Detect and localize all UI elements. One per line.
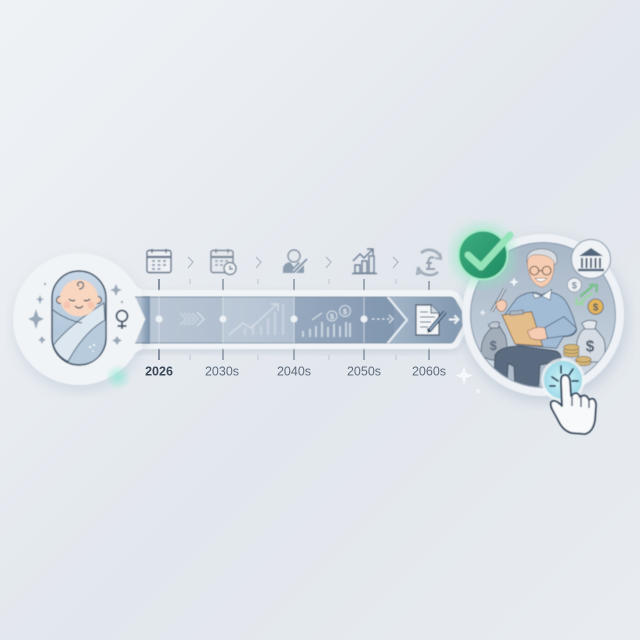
panel: timeline band [130,290,472,352]
panel: baby circle [13,253,150,391]
pen hand [492,288,505,312]
hand on clipboard [527,327,547,340]
chart: coins with bars: $ [330,312,335,321]
money bag left [481,322,507,360]
coin dollar small [567,278,581,292]
label 2050s: 2050s [347,364,381,378]
chart: chevrons faint [180,312,204,326]
head [527,249,557,265]
exchange arrows [580,285,597,297]
legs [493,346,561,390]
label 2040s: 2040s [277,364,311,378]
clipboard [502,312,543,346]
illustration: seated man: $ [572,280,578,290]
forearm [545,317,577,338]
label 2026: 2026 [145,364,173,378]
timeline icons row [147,249,441,275]
illustration: seated man: $ [593,302,599,313]
chart: coins with bars: $ [343,307,348,316]
label 2060s: 2060s [412,364,446,378]
arrowhead tip section [390,296,456,344]
money bag left: $ [490,339,497,353]
chart: coins with bars [303,306,350,337]
icon: person with pen [283,250,307,273]
sparkles [509,277,519,287]
money bag right [576,320,605,362]
icon: green check badge [451,223,515,287]
icon: tap ripple [541,358,585,402]
arrow: dotted [372,315,393,323]
glow [105,364,131,390]
panel: retiree circle [462,234,627,402]
icon: female symbol [116,310,128,329]
year labels [145,364,446,378]
collar [532,289,552,300]
tip chevron divider [387,296,407,344]
label 2030s: 2030s [205,364,239,378]
icon: swaddled baby [52,271,106,365]
timeline dots [156,316,368,322]
seat [507,360,576,388]
icon: rising bars with arrow [352,249,377,274]
money bag right: $ [586,339,595,356]
icon: cycle with pound [417,250,441,275]
icon: bank badge [572,240,610,278]
connector ticks [159,279,429,360]
section shading [223,297,294,343]
section divider lines [159,297,364,343]
icon: calendar with clock [211,249,236,274]
icon: sparkles below [455,366,480,393]
arrow: small white [449,316,458,324]
icon: pointing hand cursor [551,375,596,434]
chart: growth line with bars [229,304,283,335]
small chevrons between icons [188,257,398,268]
icon: calendar 2026 [147,249,171,272]
coin dollar gold [588,299,603,314]
illustration: seated man [479,249,605,393]
torso [503,292,577,348]
icon: document with pen [416,305,445,335]
coins [564,344,591,366]
icon: sparkles [28,283,123,345]
